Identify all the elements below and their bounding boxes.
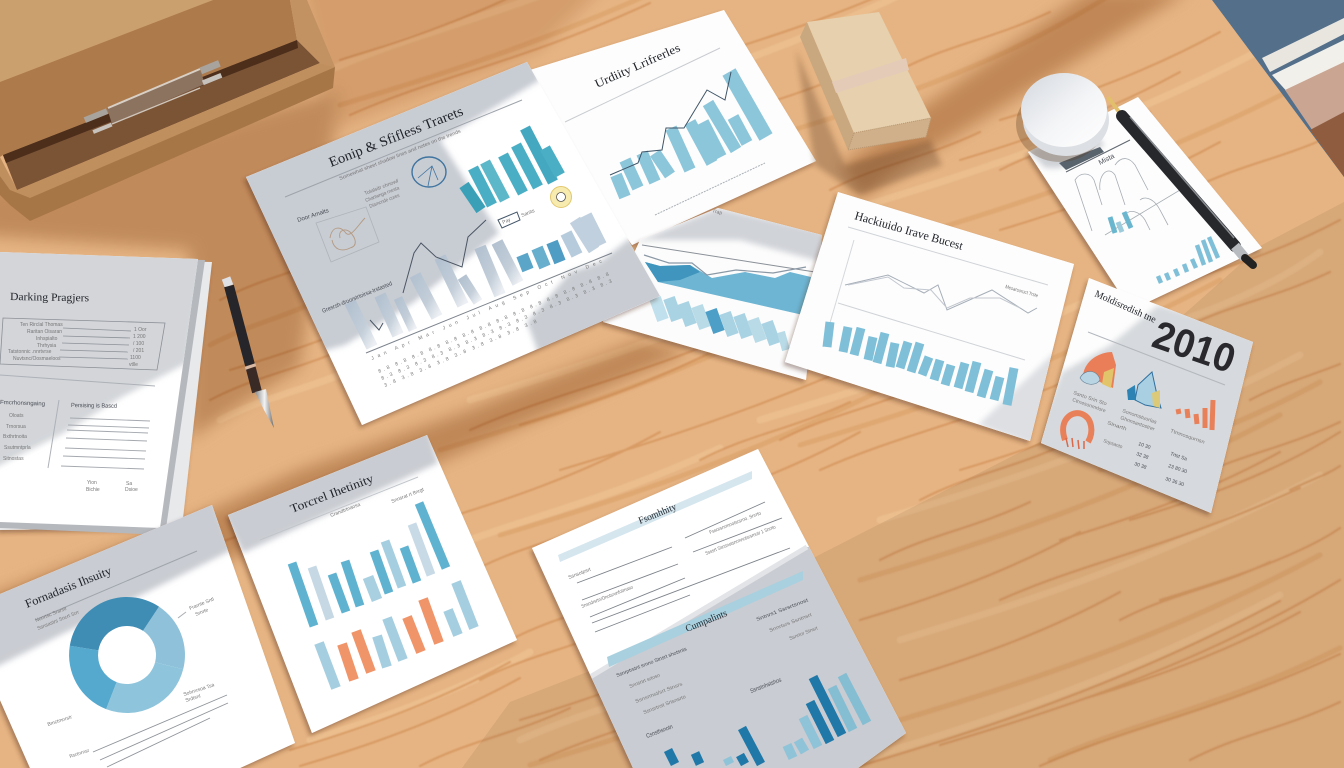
panel: stiffness trends sheet: Gresrsh-droorstrtoirsa-trstasted <box>322 281 393 315</box>
table: projects: Thrhysia <box>37 343 56 349</box>
panel: donut sheet: Rsrtnrnsr <box>69 748 90 760</box>
panel: household travel budget sheet: Mesarsoruct Trste <box>1004 284 1039 299</box>
text block: icon captions: Ttmnosqurnsn <box>1169 428 1206 446</box>
table: projects: / 100 <box>133 341 144 347</box>
text block: icon captions: Sinarth <box>1106 420 1127 432</box>
number table: 8.3 8.3 8.3 8.3 8.3 8.3 8.3 8.3 8.3 8.3 8.3 8.3 8.3 8.3 <box>380 279 613 382</box>
subheadings: Ssnstnhstshos <box>750 677 783 695</box>
number table: 2010: 10 30 <box>1137 441 1151 451</box>
heading: first section: Fsomhhity <box>637 502 678 527</box>
panel: bottom centre report sheet <box>532 449 906 768</box>
donut callouts: Frarnte Sntl <box>189 597 215 612</box>
schematic grid <box>1075 159 1180 235</box>
text block: bullets <box>616 597 819 716</box>
panel: trend activity sheet <box>222 428 517 733</box>
panel: 2010 sheet <box>1030 278 1262 525</box>
text block: bullets: Ssnrptrstnt srnno Stnsrt shotsnts <box>616 646 688 679</box>
text block: bullets: Snnsrtrt srtosn <box>629 673 661 690</box>
panel: bottom centre report sheet: Ssssrt Ssnsnotsnrmnotsrsrnotr 1 Snrrto <box>705 524 777 557</box>
panel: utility sheet <box>530 10 816 245</box>
donut callouts: Bmctmnrstr <box>47 714 73 728</box>
bar chart: blue <box>522 215 601 270</box>
panel: donut sheet: Nonrtsc Srarstr <box>35 606 68 624</box>
text block: left list: Bxthrtnoita <box>3 434 27 440</box>
bar chart: teal <box>464 128 560 210</box>
small label box: Pay <box>502 217 512 226</box>
text block: bullets: Snnrtsrs Ssntnsrt <box>769 612 813 634</box>
text block: icon captions: Ctrnesonmrlore <box>1071 397 1107 414</box>
text block: bullets: Ssnrtor Stnsrt <box>789 625 819 642</box>
panel: bottom centre report sheet: Ssnsotpsrt <box>568 567 592 581</box>
number table: 2010: 32 38 <box>1135 451 1149 461</box>
wooden tray with clip <box>0 0 335 221</box>
number table: 2010: 23 80 30 <box>1167 463 1188 475</box>
text block: bullets: Ssnsrtnst Srtsnsrto <box>643 694 687 716</box>
icon: black pen left <box>226 278 274 428</box>
icon: round diagram <box>412 157 446 187</box>
text block: left list: Trnorsua <box>6 424 26 430</box>
text block: icon captions: Ghnnsantostrer <box>1119 415 1156 433</box>
text block: side notes: Totalsitr chnowf <box>364 178 400 197</box>
heading: travel budget: Hackiuido Irave Bucest <box>853 208 965 253</box>
panel: trend activity sheet: Snnsrat rt 8nrgt <box>391 487 425 505</box>
icon: white disc <box>1016 73 1109 162</box>
line chart: travel <box>845 275 1037 313</box>
number table: 2010: Trtst Sa <box>1169 451 1188 463</box>
panel: small sheet with pen <box>1028 97 1262 310</box>
number table: Jan Apr Mar Jun Jul Aug Sep Oct Nov Dec <box>370 258 603 362</box>
text block: icon captions <box>1071 390 1206 450</box>
subheadings: Csnsthsnotn <box>646 724 674 740</box>
table: projects: Ten Rirclal Thomas <box>20 322 63 328</box>
panel: bottom centre report sheet: Snsndrsrtn/Onotsrunfotrnaso <box>581 584 634 610</box>
icon: orange arch <box>1063 413 1091 449</box>
text block: left list <box>0 400 45 462</box>
small label box <box>498 208 536 228</box>
bar chart: bottom row <box>319 582 474 688</box>
heading: small: Moldisredish tne <box>1093 289 1158 326</box>
panel: stiffness trends sheet: Somewhat sheet shadow lines and notes on the trends <box>339 128 462 182</box>
text block: left list: Ssutmntprla <box>4 445 31 451</box>
bar chart: sheet bars <box>655 298 786 350</box>
panel: donut sheet <box>0 495 295 768</box>
donut chart <box>69 597 185 713</box>
text block: side notes: Chartwnga rnesta <box>365 185 401 204</box>
panel: donut sheet: Ssnsastrs Sncrt Srrr <box>37 609 81 632</box>
icon: yellow badge <box>550 186 572 208</box>
text lines <box>93 695 228 767</box>
number table: 8.8 8.8 8.8 8.8 8.8 8.8 8.8 8.8 8.8 8.8 8.8 8.8 8.8 8.8 <box>377 272 610 375</box>
table: projects: vtlle <box>129 362 138 368</box>
heading: second section: Cumpalints <box>684 608 729 635</box>
text block: right list <box>61 403 150 469</box>
heading: donut: Fornadasis Ihsuity <box>23 563 113 611</box>
small label box: Sanits <box>521 208 536 219</box>
text block: footer: Dsioe <box>125 487 138 493</box>
bar chart: utility <box>616 72 766 197</box>
panel: area chart sheet <box>603 208 825 380</box>
panel: stacked report sheets <box>0 245 212 535</box>
donut callouts: Srnrte <box>195 607 210 618</box>
text block: side notes: Diamcnde cures <box>369 193 401 210</box>
line chart: utility <box>610 72 731 175</box>
number table: 2010: 30 36 30 <box>1164 476 1185 488</box>
subheadings <box>646 677 783 740</box>
heading: stiffness trends: Eonip & Sfifless Trarets <box>327 104 466 171</box>
bar chart: top row <box>292 503 446 626</box>
number table: 3.8 3.8 3.8 3.8 3.8 3.8 3.8 3.8 3.8 <box>383 319 538 389</box>
text block: left list: Sitnostas <box>3 456 24 462</box>
donut callouts: Sohrnrsoa Tsa <box>183 682 215 698</box>
text block: footer <box>86 480 138 493</box>
table: projects: Inhspialto <box>36 336 58 342</box>
panel: stiffness trends sheet <box>236 50 675 425</box>
header band 2 <box>607 571 803 667</box>
text block: footer: Yion <box>87 480 97 486</box>
number table: 2010: 30 38 <box>1133 461 1147 471</box>
text block: footer: Bichie <box>86 487 100 493</box>
bar chart: lower left <box>668 728 761 764</box>
text block: icon captions: Ssnto Srin Sto <box>1072 390 1108 407</box>
table: projects: 1 200 <box>133 334 146 340</box>
panel: area chart sheet: Trap <box>711 208 723 217</box>
area chart <box>644 255 811 315</box>
table: projects: Tatstonnic .nnrtvrse <box>8 349 52 355</box>
number table: 2010 <box>1134 442 1187 486</box>
icon: orange bars <box>1178 400 1213 430</box>
donut callouts: Srdtsnl <box>185 693 201 704</box>
table: projects: Raritan Oisaran <box>27 329 62 335</box>
text block: left list: Oloats <box>9 413 24 419</box>
text block: bullets: Ssnsrmst/srt Stnsrs <box>635 681 684 705</box>
panel: bottom centre report sheet: Fssorsnrmnotsrsrno. Snrrto <box>709 510 762 536</box>
bar chart: travel <box>827 322 1014 405</box>
table: projects: 1 Oor <box>134 327 147 333</box>
panel: trend activity sheet: Crandtrtnaosa <box>330 502 362 519</box>
text block: bullets: Sntnrs1 Ssrsrtsnost <box>756 597 810 623</box>
text block: icon captions: Sopsanto <box>1102 438 1123 450</box>
rows: first section <box>577 502 790 632</box>
big year number: 2010 <box>1147 313 1241 382</box>
heading: trend: Torcrel Ihetinity <box>288 471 375 516</box>
icon: metal clip handle <box>84 60 222 134</box>
mini sketch chart: Door Amalts <box>297 208 330 224</box>
icon: blue house <box>1127 372 1161 408</box>
header band 1 <box>558 471 752 562</box>
panel: household travel budget sheet <box>785 192 1074 446</box>
line chart: main <box>370 220 486 330</box>
mini sketch chart <box>297 207 379 262</box>
text block: footer: Sa <box>126 481 132 487</box>
text block: left list: Fmcrhonsngaing <box>0 400 45 408</box>
bar chart: fading grey <box>350 242 518 347</box>
panel: small sheet with pen: Mista <box>1098 153 1116 167</box>
window and floor beyond table <box>1212 0 1344 177</box>
icon: black pen right <box>1108 97 1253 265</box>
donut callouts <box>47 597 215 728</box>
bar chart: small teal <box>1110 212 1131 233</box>
text block: icon captions: Sonomstuorlas <box>1121 408 1158 426</box>
bar chart: rising bars <box>1158 237 1218 283</box>
table: projects: / 201 <box>133 348 144 354</box>
heading: projects: Darking Pragjers <box>10 291 89 304</box>
table: projects: Nuvtsnc/Oosmaeloos <box>13 356 61 362</box>
text block: right list: Persising is Bascd <box>71 403 117 410</box>
icon: wooden block <box>796 12 942 195</box>
bar chart: lower right <box>787 675 867 758</box>
table: projects <box>0 318 165 370</box>
heading: utility: Urdiity Lrifrerles <box>593 40 683 91</box>
icon: orange house <box>1080 352 1116 388</box>
text block: side notes <box>364 178 400 208</box>
table: projects: 1100 <box>130 355 141 361</box>
